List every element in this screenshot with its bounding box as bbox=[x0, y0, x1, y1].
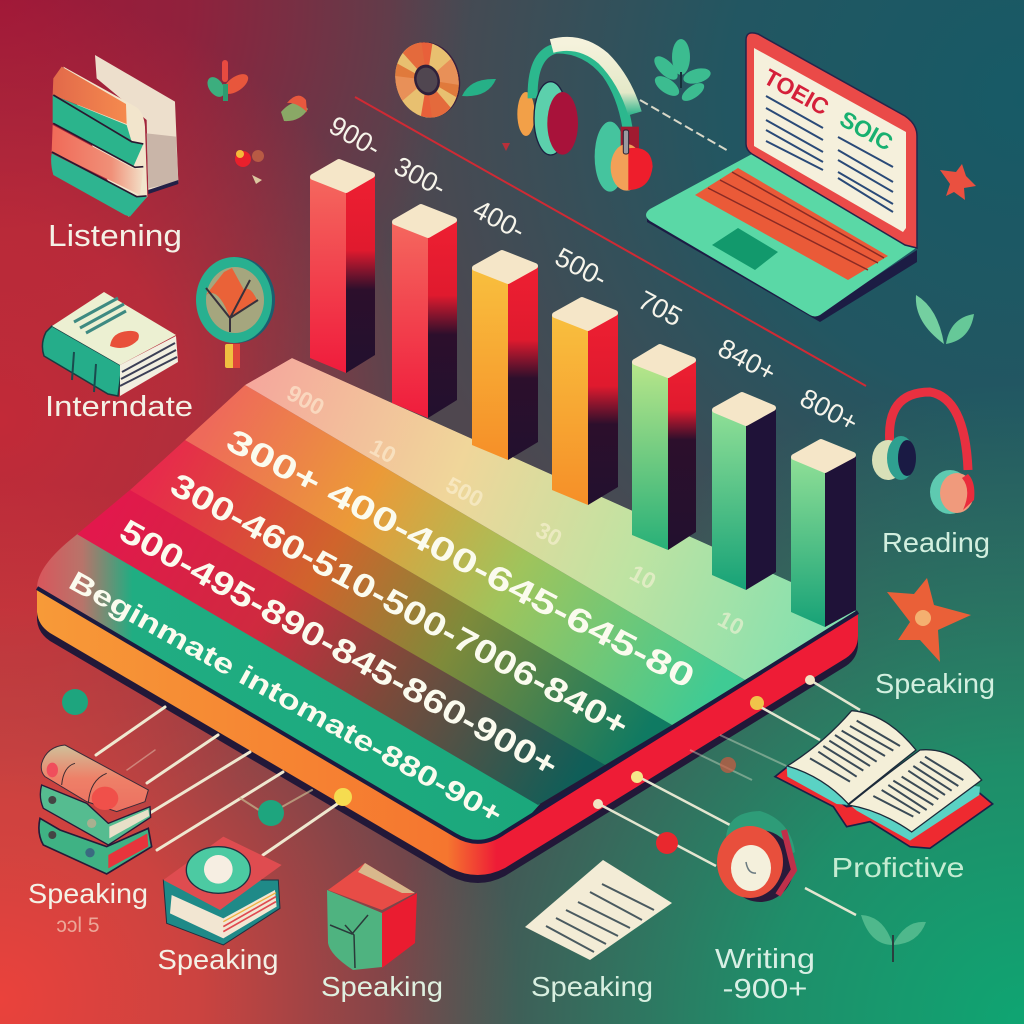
faint numbers on pale band bbox=[283, 379, 748, 640]
label: Speaking with faint 5: Speaking bbox=[28, 878, 148, 909]
icon: donut chart bbox=[389, 35, 469, 124]
label: Writing -900+ bbox=[715, 943, 815, 1004]
dot markers left bbox=[62, 689, 352, 826]
faint numbers on pale band: 30 bbox=[532, 516, 566, 551]
platform shadow bbox=[37, 600, 858, 883]
row: 300 to 80: 300+ 400-400-645-645-80 bbox=[221, 421, 701, 695]
row: 300 to 840+: 300-460-510-500-7006-840+ bbox=[165, 466, 635, 744]
label: Speaking centre left: Speaking bbox=[158, 944, 278, 975]
icon: laptop bbox=[646, 33, 917, 322]
bar 4 bbox=[552, 300, 618, 505]
bar 2 bbox=[392, 207, 457, 418]
icon: small leaf acorn bbox=[281, 96, 308, 121]
label: Speaking right: Speaking bbox=[875, 668, 995, 699]
platform bbox=[20, 358, 858, 883]
icon: leaf right bbox=[916, 295, 974, 344]
guide lines behind bars bbox=[355, 97, 866, 386]
icon: clock with headband bbox=[717, 811, 795, 902]
bar 1 bbox=[310, 162, 375, 373]
platform side bbox=[37, 588, 858, 875]
row: 500 to 900+: 500-495-890-845-860-900+ bbox=[114, 512, 564, 784]
label: Writing -900+: -900+ bbox=[722, 973, 808, 1004]
bar chart bbox=[310, 162, 856, 627]
bar 5 bbox=[632, 347, 696, 550]
top score labels: 400- bbox=[468, 194, 530, 246]
top score labels: 800+ bbox=[795, 383, 863, 438]
row: Beginmate to 90+: Beginmate intomate-880-90+ bbox=[64, 565, 508, 830]
icon: intermediate book bbox=[42, 292, 178, 396]
label: Speaking with faint 5: ɔɔl 5 bbox=[56, 914, 100, 937]
icon: open book bbox=[775, 711, 993, 848]
connector lines left bbox=[96, 707, 343, 855]
connector lines right bbox=[597, 680, 860, 915]
icon: top headphones bbox=[517, 44, 653, 192]
top score labels: 705 bbox=[633, 285, 687, 332]
top score labels bbox=[324, 110, 863, 438]
top score labels: 500- bbox=[550, 242, 612, 294]
label: Speaking bottom: Speaking bbox=[531, 971, 653, 1002]
faint numbers on pale band: 10 bbox=[714, 605, 748, 640]
icon: bottom left book stack bbox=[39, 745, 152, 874]
label: TOEIC SOIC on laptop screen bbox=[760, 64, 897, 156]
platform score rows bbox=[64, 421, 701, 830]
icon: cube with leaf bbox=[327, 863, 417, 970]
platform top bands bbox=[20, 358, 858, 860]
icon: right star bbox=[887, 578, 971, 662]
icon: listening book stack bbox=[51, 55, 178, 217]
icon: small leaf red green bbox=[204, 60, 251, 101]
label: Reading: Reading bbox=[882, 527, 990, 558]
label: Speaking with faint 5 bbox=[28, 878, 148, 937]
faint numbers on pale band: 900 bbox=[283, 379, 329, 420]
bar 7 bbox=[791, 442, 856, 627]
label: Intermediate: Interndate bbox=[45, 391, 193, 423]
icon: right headphones bbox=[872, 392, 974, 514]
icon: small leaf near donut bbox=[462, 79, 496, 96]
label: Listening: Listening bbox=[48, 218, 182, 253]
label: Writing -900+: Writing bbox=[715, 943, 815, 974]
faint numbers on pale band: 500 bbox=[442, 471, 488, 512]
top score labels: 900- bbox=[324, 110, 386, 163]
icon: leaf bottom right bbox=[861, 915, 926, 962]
dot markers right bbox=[593, 675, 815, 854]
icon: paper sheet bbox=[525, 860, 672, 960]
top score labels: 300- bbox=[389, 151, 451, 203]
icon: magnifier with leaf bbox=[196, 257, 275, 368]
bar 6 bbox=[712, 395, 776, 590]
icon: star bbox=[940, 164, 976, 200]
bar 3 bbox=[472, 253, 538, 460]
icon: leaf sprig top bbox=[650, 39, 712, 104]
label: TOEIC SOIC on laptop screen: TOEIC bbox=[760, 64, 833, 120]
top score labels: 840+ bbox=[713, 333, 781, 388]
platform rim bbox=[37, 588, 858, 842]
label: TOEIC SOIC on laptop screen: SOIC bbox=[836, 106, 897, 156]
faint numbers on pale band: 10 bbox=[366, 433, 400, 468]
label: Speaking centre: Speaking bbox=[321, 971, 443, 1002]
label: Profictive: Profictive bbox=[832, 852, 964, 883]
icon: bottom book with dial bbox=[163, 837, 282, 945]
faint numbers on pale band: 10 bbox=[626, 559, 660, 594]
icon: small red flower bbox=[235, 150, 264, 184]
